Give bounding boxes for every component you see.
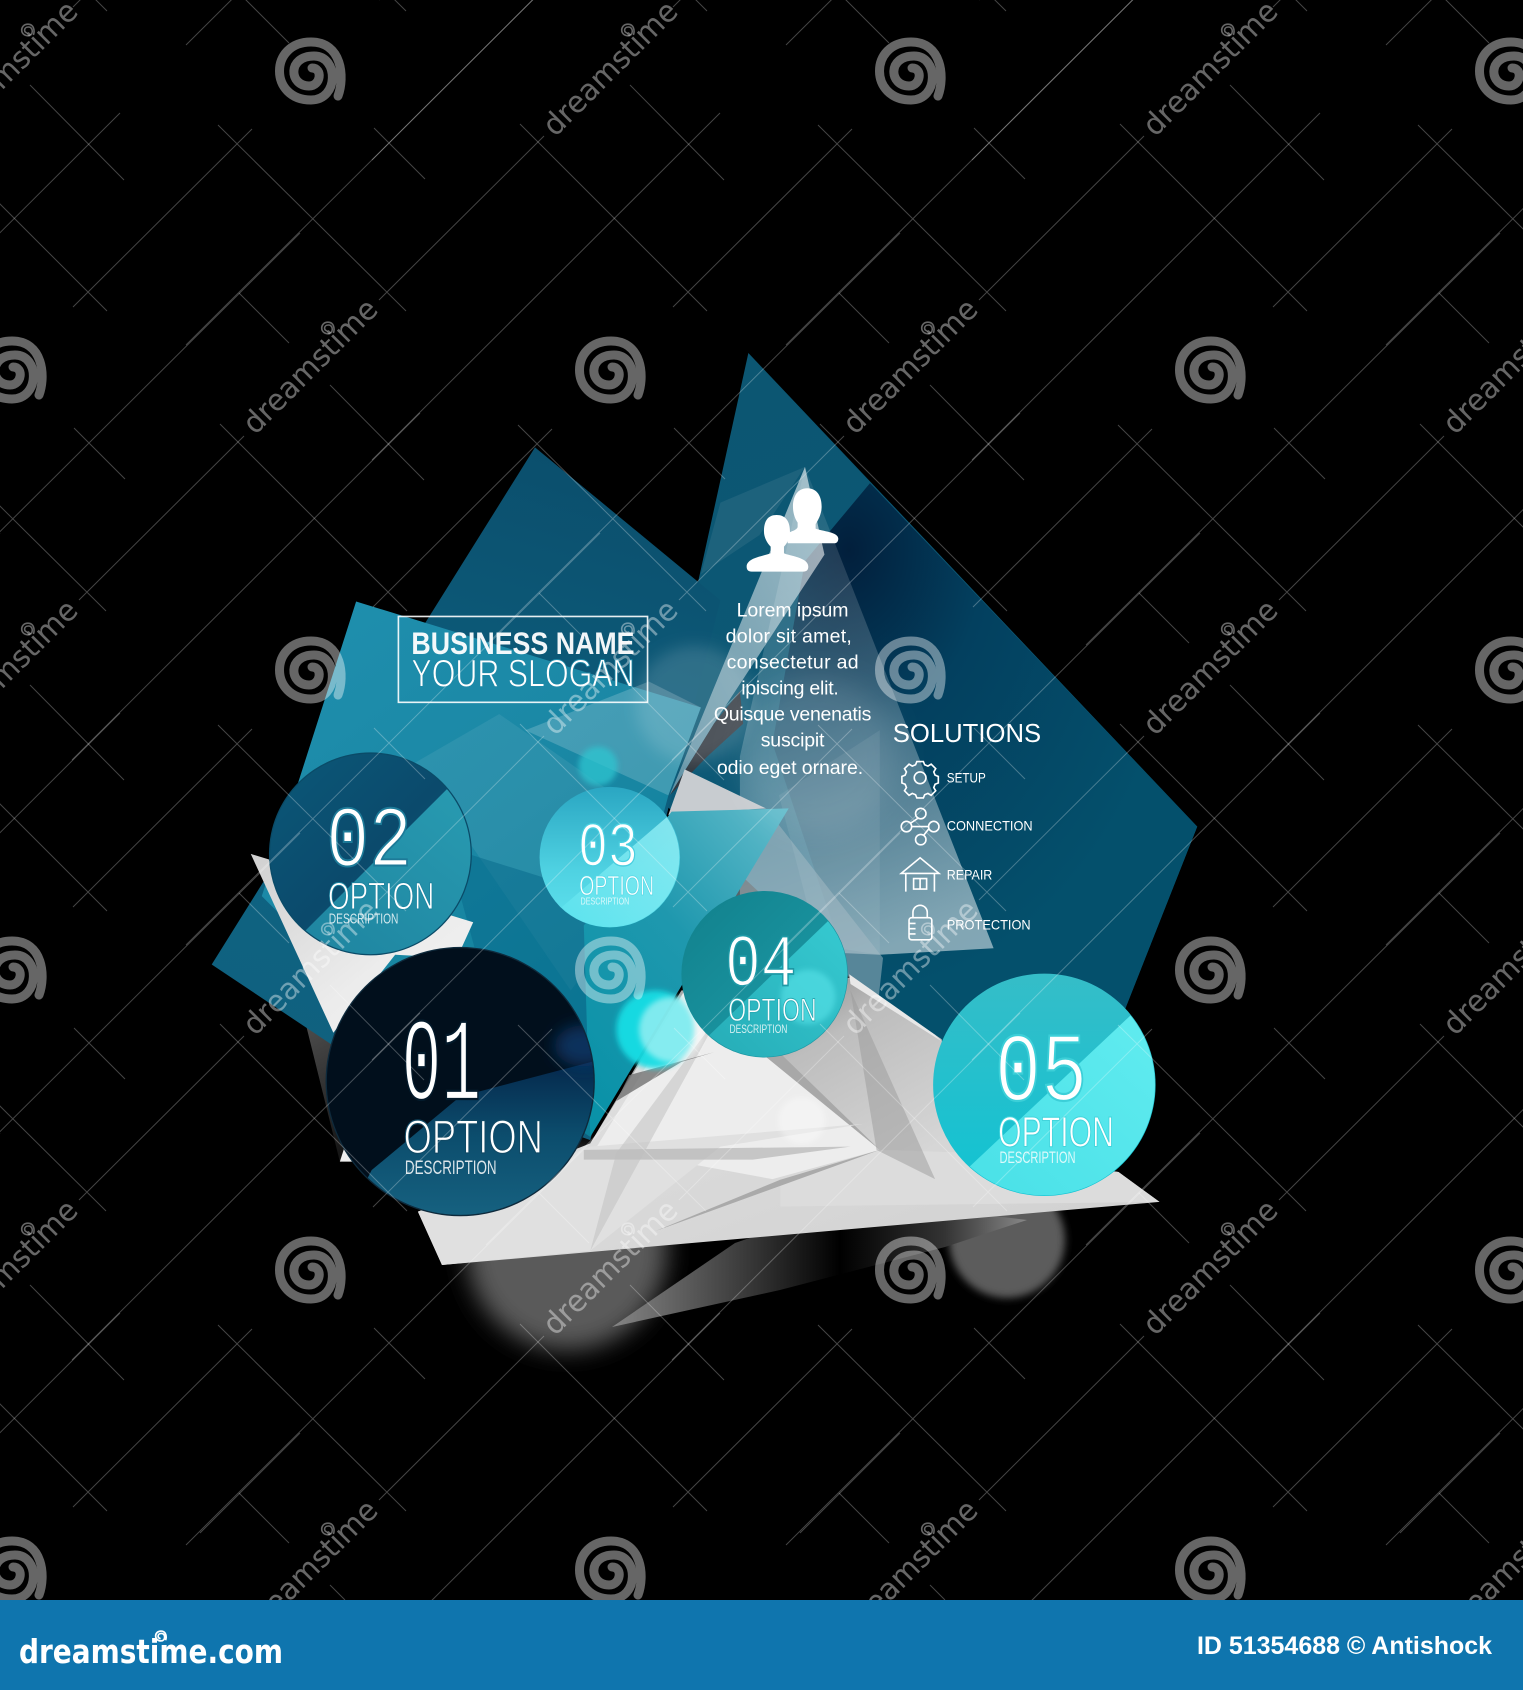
- panel: pale facets in teal polygon: [415, 682, 701, 1056]
- panel: grey base under facets: [590, 977, 961, 1186]
- glow on circle 01: [555, 1025, 613, 1067]
- panel: vertical band: [779, 730, 880, 955]
- watermark wordmarks: dreamstime: [536, 1193, 685, 1342]
- protection label: PROTECTION: [947, 917, 1031, 932]
- watermark wordmarks: dreamstime: [836, 292, 985, 441]
- option label: OPTION: [404, 1111, 543, 1163]
- bokeh lights: [579, 646, 896, 1144]
- watermark wordmarks: dreamstime: [836, 1493, 985, 1642]
- panel: main white polygon: [418, 991, 1159, 1265]
- icon: house: [901, 858, 939, 892]
- solutions list: [901, 762, 1033, 940]
- bokeh shadows under the artwork: [467, 1150, 1065, 1350]
- description: DESCRIPTION: [581, 897, 629, 908]
- panel: translucent tall triangle: [740, 467, 994, 955]
- icon: lock: [909, 905, 932, 940]
- lorem ipsum text block: Quisque venenatis: [714, 704, 872, 726]
- panel: grey right region: [772, 977, 961, 1186]
- panel: pale facet under text: [668, 769, 766, 815]
- setup label: SETUP: [947, 770, 986, 785]
- watermark wordmarks: dreamstime: [836, 893, 985, 1042]
- option label: OPTION: [998, 1109, 1114, 1156]
- option label: OPTION: [328, 875, 434, 918]
- number 02: 02: [326, 795, 412, 892]
- footer logo text: dreamstime.com: [19, 1632, 283, 1671]
- repair label: REPAIR: [947, 867, 992, 882]
- description: DESCRIPTION: [405, 1157, 497, 1179]
- footer band: [0, 1600, 1523, 1690]
- option label: OPTION: [728, 992, 817, 1028]
- option label: OPTION: [579, 870, 654, 901]
- icon: logo spiral: [156, 1631, 166, 1641]
- option circle 05: [929, 974, 1163, 1205]
- panel: white shard toward apex: [670, 467, 824, 795]
- panel: bright teal triangle: [584, 808, 789, 1137]
- panel: dark shard beside lorem text: [670, 691, 743, 795]
- business name box: [398, 616, 648, 702]
- number 01: 01: [402, 1003, 481, 1135]
- watermark wordmarks: dreamstime: [1136, 1193, 1285, 1342]
- lorem ipsum text block: dolor sit amet,: [726, 625, 852, 647]
- lorem ipsum text block: odio eget ornare.: [717, 757, 863, 779]
- option circle 01: [326, 946, 595, 1216]
- watermark wordmarks: dreamstime: [236, 292, 385, 441]
- panel: dark navy field: [772, 483, 1197, 1044]
- slogan: YOUR SLOGAN: [411, 653, 635, 696]
- icon: gear: [902, 762, 938, 798]
- watermark wordmarks: dreamstime: [1136, 593, 1285, 742]
- option circle 04: [681, 891, 857, 1062]
- decorative highlight edge: [849, 974, 942, 1041]
- number 03: 03: [578, 814, 638, 885]
- icon: connection: [901, 808, 939, 845]
- panel: upper right dark polygon: [655, 353, 1197, 1044]
- geometric artwork: [212, 353, 1197, 1265]
- panel: dark shard lower left: [281, 925, 415, 1162]
- panel: white shard behind circle 02: [251, 854, 473, 1033]
- business name: BUSINESS NAME: [411, 626, 635, 661]
- number 04: 04: [725, 924, 797, 1008]
- option circle 02: [268, 752, 472, 956]
- watermark wordmarks: dreamstime: [236, 1493, 385, 1642]
- description: DESCRIPTION: [999, 1149, 1076, 1167]
- white tip lower left: [340, 1143, 354, 1162]
- solutions heading: SOLUTIONS: [893, 718, 1041, 748]
- lorem ipsum text block: suscipit: [761, 730, 825, 752]
- watermark wordmarks: dreamstime: [536, 593, 685, 742]
- panel: left square: [212, 447, 720, 1140]
- icon: people: [747, 488, 838, 572]
- lorem ipsum text block: Lorem ipsum: [737, 599, 849, 621]
- lorem ipsum text block: ipiscing elit.: [741, 678, 839, 700]
- panel: white facets: [418, 991, 1159, 1265]
- image id and author: ID 51354688 © Antishock: [1197, 1632, 1492, 1660]
- panel: lighter teal facet top: [701, 467, 805, 574]
- description: DESCRIPTION: [329, 911, 398, 927]
- lorem ipsum text block: [714, 599, 872, 779]
- connection label: CONNECTION: [947, 818, 1033, 833]
- lorem ipsum text block: consectetur ad: [727, 652, 859, 674]
- option circle 03: [540, 787, 680, 928]
- panel: mid teal polygon: [262, 602, 701, 1137]
- panel: grey translucent facet: [668, 808, 883, 1017]
- description: DESCRIPTION: [730, 1022, 787, 1036]
- watermark wordmarks: dreamstime: [236, 893, 385, 1042]
- number 05: 05: [995, 1020, 1087, 1130]
- small spirals on wordmarks: [22, 24, 1234, 1535]
